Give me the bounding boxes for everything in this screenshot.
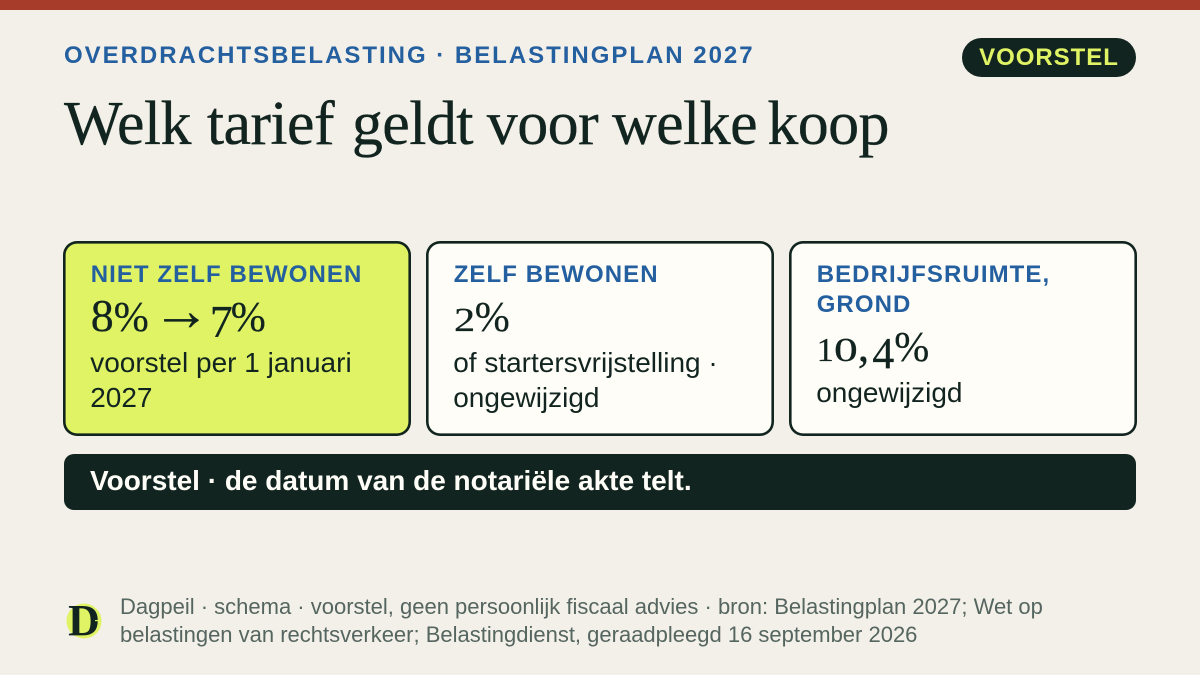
rate: 0 xyxy=(834,332,857,368)
note: voorstel per 1 januari xyxy=(90,347,352,378)
rate: % xyxy=(475,295,508,341)
panel: niet zelf bewonen xyxy=(63,241,411,436)
label: GROND xyxy=(817,291,911,318)
label: BEDRIJFSRUIMTE, xyxy=(817,261,1050,288)
rate: → xyxy=(152,278,210,343)
note: 2027 xyxy=(90,382,152,413)
rate: 4 xyxy=(872,328,894,378)
rate: 7 xyxy=(210,296,233,347)
panel: bedrijfsruimte, grond xyxy=(789,241,1137,436)
rate: , xyxy=(858,320,869,370)
rate xyxy=(91,278,264,347)
source note: Dagpeil · schema · voorstel, geen persoonlijk fiscaal advies · bron: Belastingplan 2027; Wet op xyxy=(120,594,1043,619)
note xyxy=(453,347,718,413)
label xyxy=(817,261,1050,318)
rate: 8 xyxy=(91,290,114,341)
top accent bar xyxy=(0,0,1200,10)
note: of startersvrijstelling · xyxy=(453,347,718,378)
title: Welk tarief geldt voor welke koop xyxy=(64,90,889,158)
note: ongewijzigd xyxy=(453,382,600,413)
note xyxy=(90,347,352,413)
eyebrow: OVERDRACHTSBELASTING · BELASTINGPLAN 2027 xyxy=(64,42,755,69)
status badge: voorstel: VOORSTEL xyxy=(979,44,1119,71)
callout bar xyxy=(64,454,1136,510)
label: ZELF BEWONEN xyxy=(454,261,659,288)
panel: zelf bewonen xyxy=(426,241,774,436)
rate: 1 xyxy=(817,332,834,368)
rate xyxy=(454,295,508,341)
label: NIET ZELF BEWONEN xyxy=(91,261,362,288)
rate: 2 xyxy=(454,302,475,339)
rate: % xyxy=(231,295,264,341)
status badge: voorstel xyxy=(962,38,1136,77)
rate xyxy=(817,320,928,378)
rate: % xyxy=(114,295,147,341)
rate: % xyxy=(894,324,927,370)
note: ongewijzigd xyxy=(816,376,963,408)
source note: belastingen van rechtsverkeer; Belastingdienst, geraadpleegd 16 september 2026 xyxy=(120,622,917,647)
callout bar: Voorstel · de datum van de notariële akte telt. xyxy=(90,465,692,496)
source note xyxy=(120,594,1043,647)
